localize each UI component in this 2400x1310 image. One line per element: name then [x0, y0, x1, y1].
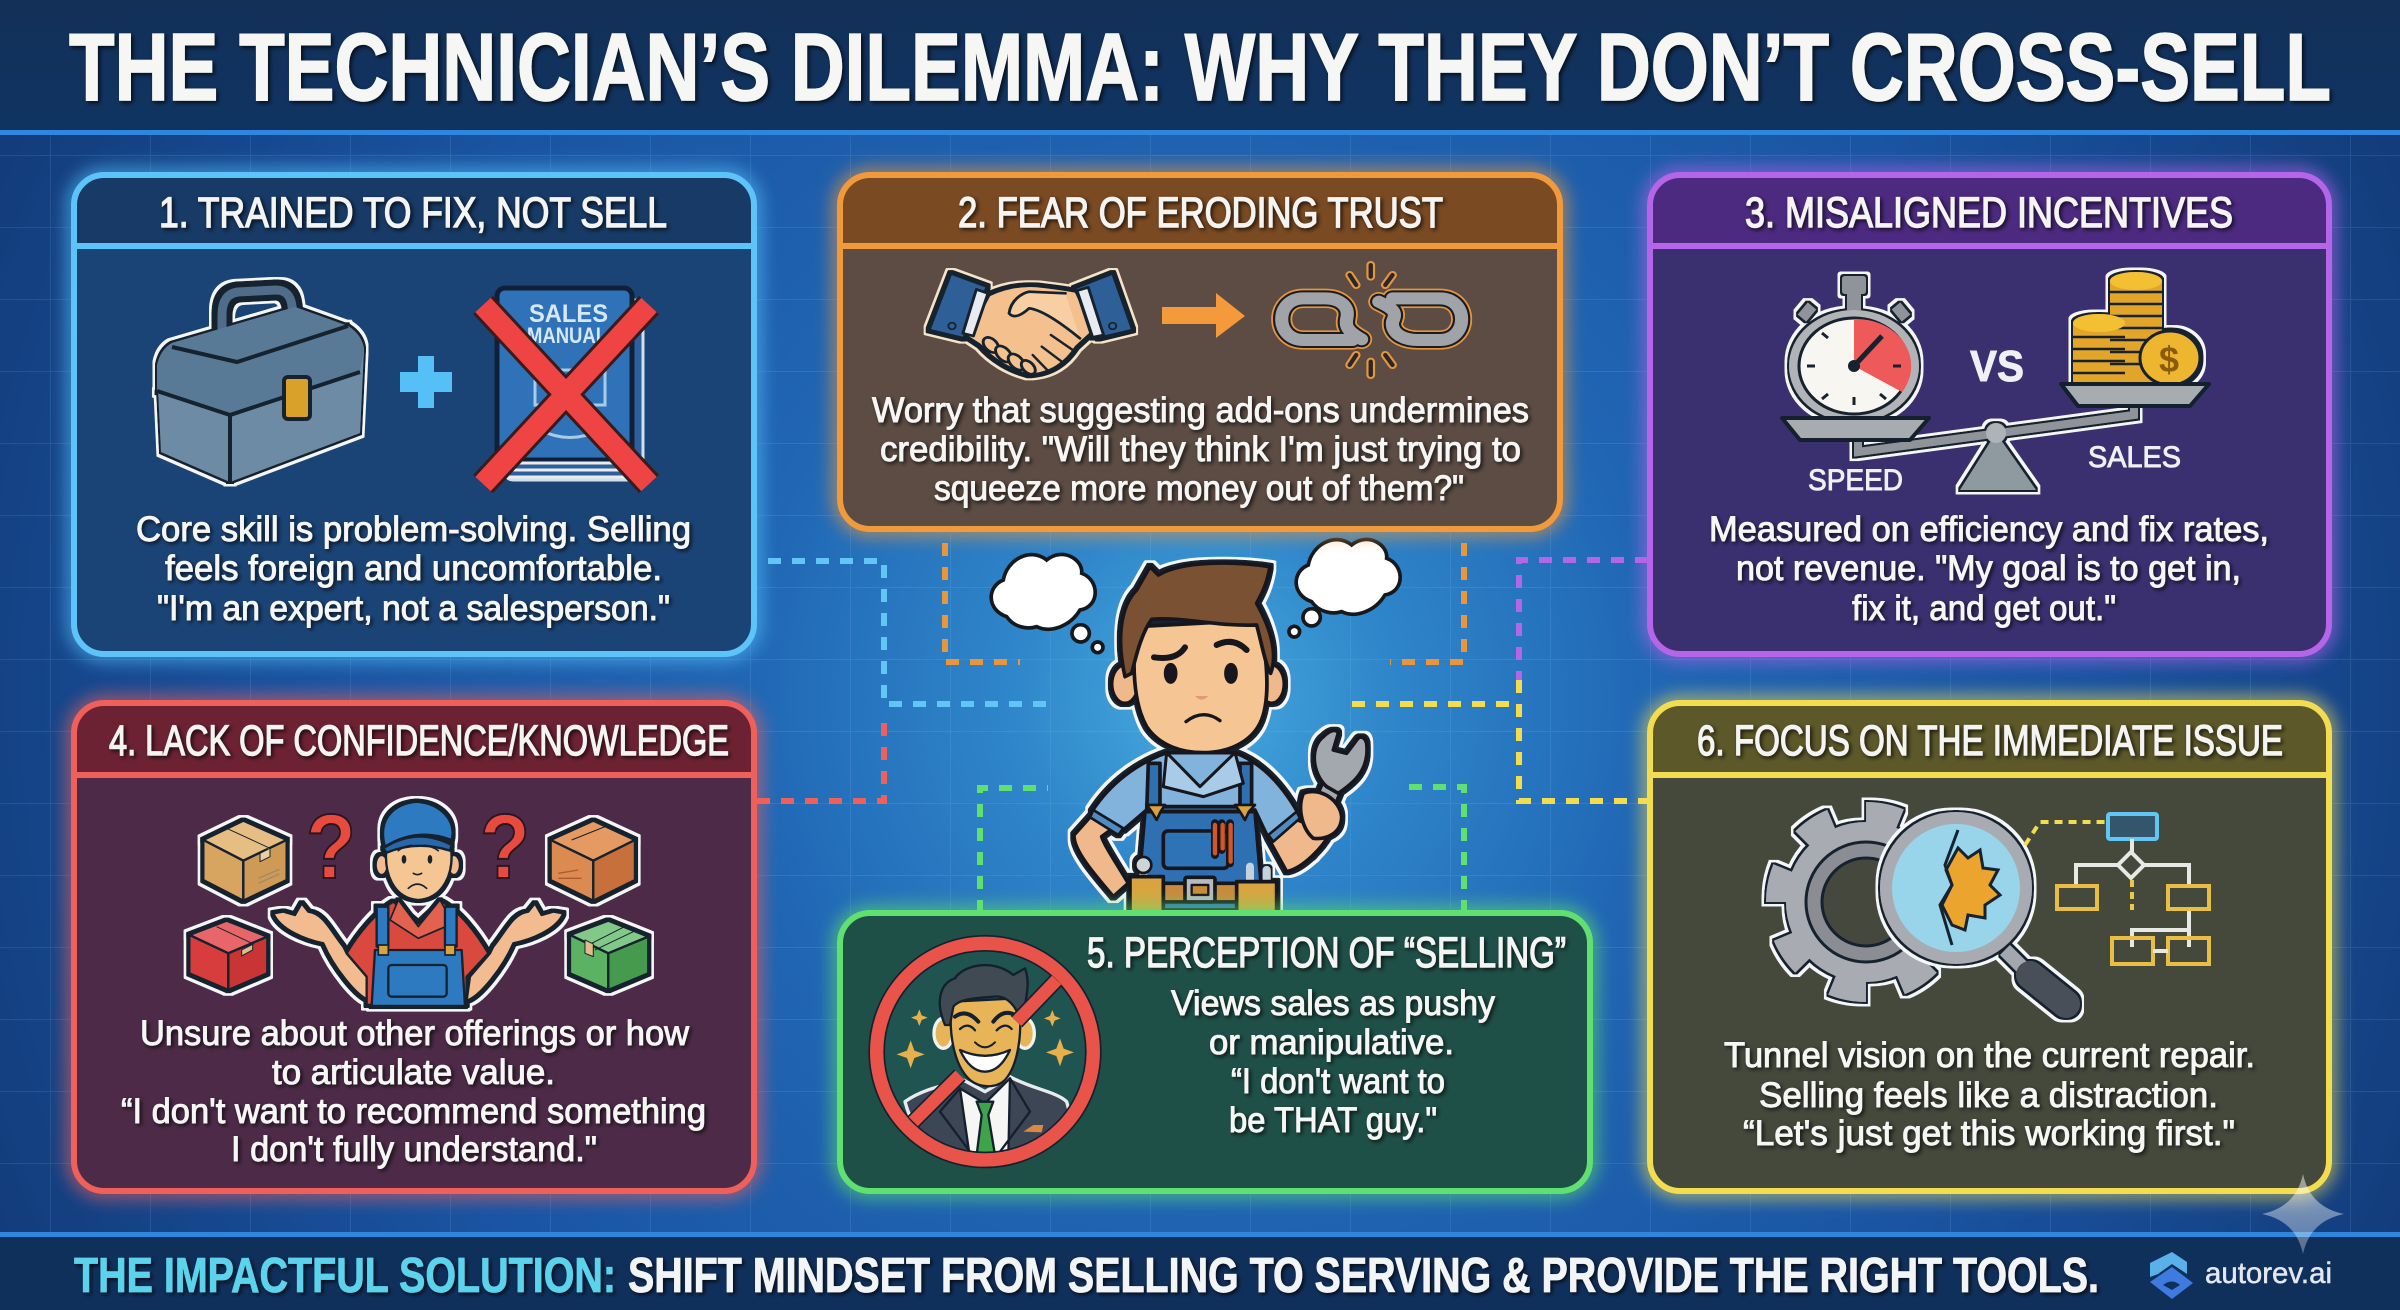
panel 6 text: Selling feels like a distraction. [1759, 1076, 2218, 1115]
panel 4 text [121, 1014, 706, 1169]
icon: plus [400, 356, 452, 408]
panel 5 heading: 5. PERCEPTION OF “SELLING” [1087, 929, 1566, 977]
panel 5 text [1171, 984, 1495, 1140]
icon: magnifying glass [1886, 818, 2066, 1004]
icon: red box [189, 921, 267, 990]
panel 2 text: Worry that suggesting add-ons undermines [872, 391, 1529, 430]
icon: broken chain [1282, 265, 1462, 375]
stopwatch [1789, 276, 1919, 422]
panel 4 heading: 4. LACK OF CONFIDENCE/KNOWLEDGE [109, 717, 729, 765]
face [1134, 620, 1267, 753]
footer solution statement: THE IMPACTFUL SOLUTION: [74, 1249, 616, 1303]
panel 2 text [872, 391, 1529, 508]
panel 4 text: to articulate value. [272, 1053, 555, 1092]
SPEED label: SPEED [1808, 464, 1903, 497]
panel 1: trained to fix, not sell [74, 175, 754, 654]
panel 2: fear of eroding trust [840, 175, 1560, 529]
panel 1 text: Core skill is problem-solving. Selling [136, 510, 691, 549]
tool belt and pouches [1130, 857, 1277, 913]
VS label: VS [1970, 342, 2024, 391]
icon: tan box [203, 821, 287, 901]
icon: orange box [551, 821, 635, 901]
icon: crossed-out sales manual: SALES [529, 300, 608, 328]
icon: green box [570, 921, 648, 990]
panel 2 heading: 2. FEAR OF ERODING TRUST [958, 189, 1443, 237]
panel 6 text: Tunnel vision on the current repair. [1724, 1036, 2255, 1075]
salesman head [934, 965, 1034, 1086]
coin stacks: $ [2159, 339, 2179, 380]
panel 1 text: feels foreign and uncomfortable. [165, 549, 662, 588]
panel 3: misaligned incentives [1650, 175, 2329, 654]
panel 5: perception of selling [840, 913, 1590, 1191]
panel 3 heading: 3. MISALIGNED INCENTIVES [1745, 189, 2233, 237]
thought clouds [991, 539, 1400, 653]
confused worker [273, 802, 563, 1006]
question marks: ? [306, 796, 356, 898]
panel 6: focus on the immediate issue [1650, 703, 2329, 1191]
question marks [306, 796, 530, 898]
icon: no pushy salesman [877, 943, 1093, 1163]
panel 3 text [1709, 510, 2269, 628]
panel 5 text: Views sales as pushy [1171, 984, 1495, 1023]
panel 4: lack of confidence/knowledge [74, 703, 754, 1191]
panel 2 text: squeeze more money out of them?" [934, 469, 1464, 508]
dashed connectors [757, 543, 1648, 913]
autorev.ai logo [2150, 1252, 2332, 1299]
SALES label: SALES [2088, 441, 2181, 474]
panel 6 text: “Let's just get this working first." [1743, 1114, 2235, 1153]
icon: cracked gear [1778, 814, 1954, 990]
scale beam and base [1858, 400, 2134, 490]
ears [1112, 665, 1284, 703]
autorev.ai logo: autorev.ai [2205, 1257, 2332, 1290]
wrench [1295, 730, 1367, 858]
panel 5 text: “I don't want to [1231, 1062, 1445, 1101]
sparkle watermark [2262, 1174, 2344, 1254]
left pan [1782, 418, 1929, 440]
prohibition ring and slash [877, 943, 1093, 1160]
panel 2 text: credibility. "Will they think I'm just trying to [880, 430, 1521, 469]
panel 4 text: “I don't want to recommend something [121, 1092, 706, 1131]
facial features [1154, 642, 1247, 722]
sparkles [897, 1009, 1074, 1068]
panel 6 text [1724, 1036, 2255, 1153]
icon: toolbox [157, 290, 364, 482]
icon: crossed-out sales manual [483, 288, 649, 484]
central technician character [1074, 563, 1367, 913]
arms and shirt [1074, 753, 1330, 897]
arrow [1162, 293, 1245, 338]
icon: crossed-out sales manual: MANUAL [527, 323, 607, 348]
hand gripping wrench [1301, 792, 1342, 839]
panel 1 text: "I'm an expert, not a salesperson." [157, 589, 670, 628]
salesman figure [903, 1075, 1070, 1152]
header band [0, 0, 2400, 135]
panel 4 text: I don't fully understand." [231, 1130, 597, 1169]
question marks: ? [480, 796, 530, 898]
icon: balance scale with stopwatch and coins [1782, 272, 2209, 497]
coin stacks [2073, 272, 2200, 385]
panel 1 text [136, 510, 691, 628]
panel 3 text: not revenue. "My goal is to get in, [1736, 549, 2241, 588]
panel 1 heading: 1. TRAINED TO FIX, NOT SELL [159, 189, 667, 237]
panel 5 text: be THAT guy." [1229, 1101, 1437, 1140]
panel 3 text: fix it, and get out." [1852, 589, 2116, 628]
right pan [2061, 384, 2209, 406]
panel 3 text: Measured on efficiency and fix rates, [1709, 510, 2269, 549]
icon: flowchart [2025, 814, 2209, 964]
footer band [0, 1232, 2400, 1310]
panel 5 text: or manipulative. [1209, 1023, 1454, 1062]
footer solution statement [74, 1249, 2099, 1303]
overalls [1137, 753, 1263, 910]
hair [1121, 563, 1274, 677]
panel 4 text: Unsure about other offerings or how [140, 1014, 690, 1053]
icon: handshake [929, 273, 1133, 377]
